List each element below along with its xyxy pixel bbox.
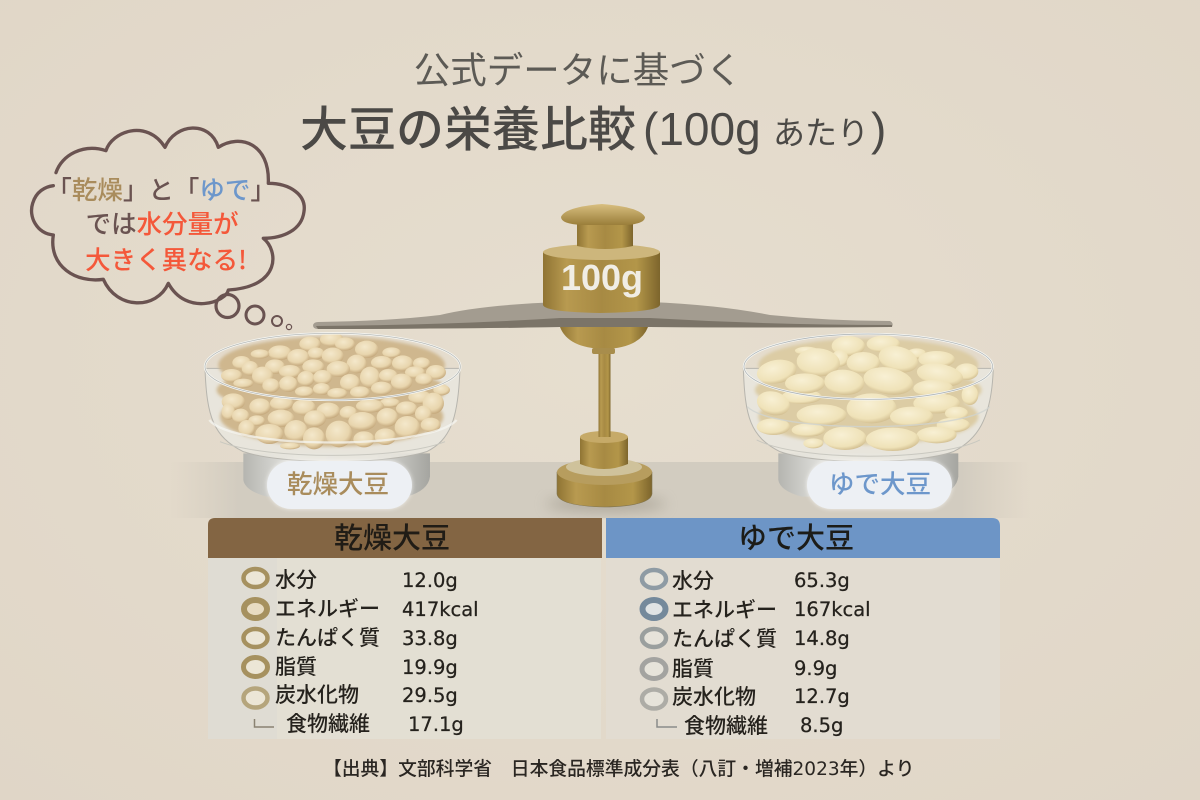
panel body	[606, 558, 1000, 739]
row text: たんぱく質	[275, 622, 380, 652]
balance scale	[313, 204, 893, 511]
dried beans	[221, 332, 450, 449]
row text	[672, 565, 871, 740]
weight label: 100g	[561, 257, 643, 298]
row text: 食物繊維	[684, 710, 768, 740]
panel header	[606, 518, 1000, 558]
title line 2: あたり	[773, 108, 869, 154]
title	[300, 41, 886, 160]
bubble text: 大きく異なる!	[85, 240, 247, 277]
bubble text: では水分量が	[86, 204, 239, 241]
bubble outline	[32, 128, 304, 304]
row text: 29.5g	[402, 684, 458, 707]
row text	[275, 564, 479, 738]
panel: dried soybeans table: 乾燥大豆	[334, 515, 450, 557]
scale beam	[313, 302, 893, 329]
glass highlights	[205, 333, 460, 455]
panel: dried soybeans table	[208, 515, 602, 739]
row icons	[244, 569, 268, 708]
row text: 9.9g	[794, 657, 837, 680]
label pill: dried: 乾燥大豆	[287, 464, 389, 501]
panel: boiled soybeans table: ゆで大豆	[738, 515, 854, 557]
row text: 19.9g	[402, 656, 458, 679]
source note: 【出典】文部科学省 日本食品標準成分表（八訂・増補2023年）より	[323, 754, 914, 781]
row text: 炭水化物	[672, 681, 756, 711]
label pill: boiled	[807, 461, 952, 509]
panel: boiled soybeans table	[606, 515, 1000, 740]
title line 1: 公式データに基づく	[414, 41, 742, 94]
row text: 12.7g	[794, 685, 850, 708]
dried soybeans bowl	[205, 332, 460, 497]
glass highlights	[744, 334, 993, 456]
title line 2: )	[871, 103, 886, 155]
row text: 417kcal	[402, 598, 479, 621]
row text: 167kcal	[794, 598, 871, 621]
panel body	[208, 558, 601, 739]
row text: 65.3g	[794, 569, 850, 592]
thought bubble callout	[32, 128, 304, 330]
bubble tail circles	[216, 294, 292, 330]
row text: 33.8g	[402, 627, 458, 650]
bubble text: 「乾燥」と「ゆで」	[46, 170, 276, 207]
row text: 脂質	[672, 653, 714, 683]
bowl body	[205, 368, 460, 462]
title line 2	[300, 90, 886, 160]
row text: たんぱく質	[672, 623, 777, 653]
scale rod	[598, 350, 610, 437]
title line 2: (100g	[643, 103, 761, 155]
sub-row marker	[657, 719, 677, 727]
row text: 14.8g	[794, 627, 850, 650]
sub-row marker	[254, 719, 274, 727]
row text: 炭水化物	[275, 679, 359, 709]
row icons	[642, 570, 666, 708]
table surface	[170, 462, 1030, 518]
row text: 12.0g	[402, 569, 458, 592]
panel header	[208, 518, 602, 558]
bowl foot	[243, 453, 430, 497]
row text: 8.5g	[800, 714, 843, 737]
bean backing	[217, 337, 447, 447]
row text: 食物繊維	[286, 708, 370, 738]
boiled soybeans bowl	[743, 334, 993, 497]
row text: 脂質	[275, 651, 317, 681]
bowl foot	[778, 453, 958, 497]
scale base	[557, 431, 652, 507]
bowl body	[743, 368, 993, 462]
base shadow	[546, 497, 666, 511]
weight	[543, 204, 660, 313]
row text: 水分	[275, 564, 317, 594]
bean backing	[755, 338, 982, 445]
row text: 水分	[672, 565, 714, 595]
row text: 17.1g	[408, 713, 464, 736]
row text: エネルギー	[672, 594, 777, 624]
title line 2: 大豆の栄養比較	[300, 90, 636, 160]
beam support cup	[560, 327, 648, 349]
label pill: boiled: ゆで大豆	[829, 464, 931, 501]
row text: エネルギー	[275, 593, 380, 623]
boiled beans	[754, 336, 978, 451]
label pill: dried	[267, 461, 412, 509]
